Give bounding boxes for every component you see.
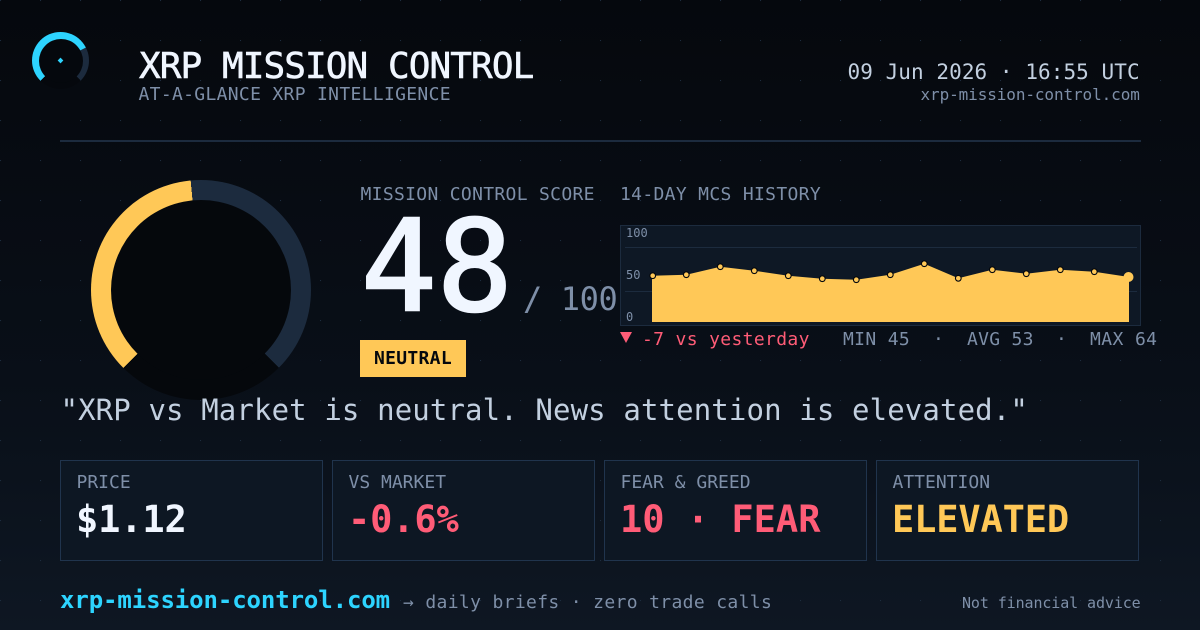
area chart: 14-day history: 0 <box>626 310 633 324</box>
header divider <box>60 140 1141 142</box>
footer link: xrp-mission-control.com <box>60 586 390 614</box>
area chart: 14-day history <box>620 225 1141 326</box>
separator: · <box>933 329 944 350</box>
value: ELEVATED <box>892 498 1069 541</box>
title: XRP MISSION CONTROL <box>139 46 533 87</box>
icon: down triangle <box>620 332 632 343</box>
icon: logo gauge <box>32 32 89 81</box>
label: ATTENTION <box>892 472 990 493</box>
subtitle: AT-A-GLANCE XRP INTELLIGENCE <box>138 84 451 105</box>
score value: 48 <box>361 192 513 340</box>
card: attention <box>876 460 1139 561</box>
value: $1.12 <box>76 498 187 541</box>
status badge: NEUTRAL <box>374 348 452 369</box>
card: vs market <box>332 460 595 561</box>
area chart: 14-day history: 100 <box>626 226 648 240</box>
score label: MISSION CONTROL SCORE <box>360 184 595 205</box>
maximum: MAX 64 <box>1090 329 1157 350</box>
quote: "XRP vs Market is neutral. News attention is elevated." <box>60 393 1028 427</box>
status badge <box>360 340 466 377</box>
value: -0.6% <box>348 498 459 541</box>
chart stats <box>843 329 1157 350</box>
average: AVG 53 <box>967 329 1034 350</box>
delta vs yesterday: -7 vs yesterday <box>642 329 810 350</box>
card: price <box>60 460 323 561</box>
site url: xrp-mission-control.com <box>920 85 1140 104</box>
label: VS MARKET <box>348 472 446 493</box>
value: 10 · FEAR <box>620 498 820 541</box>
card: fear and greed <box>604 460 867 561</box>
disclaimer: Not financial advice <box>962 594 1141 612</box>
separator: · <box>1056 329 1067 350</box>
label: FEAR & GREED <box>620 472 751 493</box>
minimum: MIN 45 <box>843 329 910 350</box>
footer tagline: → daily briefs · zero trade calls <box>403 592 772 613</box>
area chart: 14-day history: 50 <box>626 268 640 282</box>
gauge: score ring <box>91 180 311 400</box>
chart heading: 14-DAY MCS HISTORY <box>620 184 821 205</box>
label: PRICE <box>76 472 131 493</box>
date and time: 09 Jun 2026 · 16:55 UTC <box>848 60 1140 84</box>
score scale: / 100 <box>523 280 617 318</box>
